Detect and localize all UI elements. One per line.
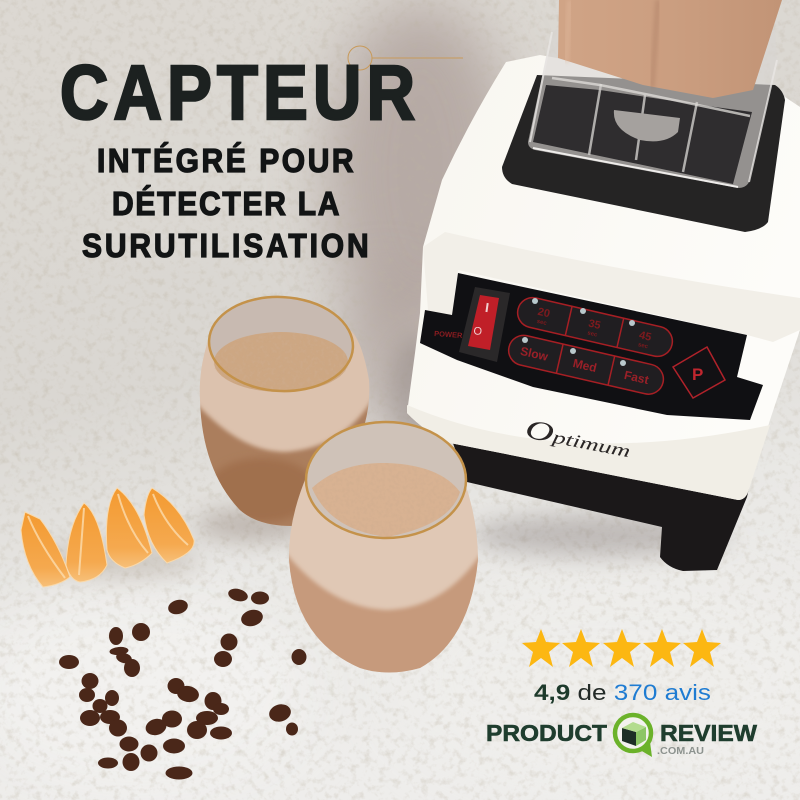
back glass opening bbox=[207, 293, 355, 395]
indicator lights bbox=[522, 298, 635, 366]
clear jar base bbox=[528, 30, 777, 188]
back glass bbox=[195, 293, 375, 530]
front glass bbox=[285, 422, 485, 680]
back glass liquid surface bbox=[214, 332, 348, 392]
pulse button bbox=[673, 347, 725, 398]
speed buttons: Fast bbox=[623, 368, 650, 387]
speed buttons bbox=[506, 332, 666, 397]
rating text: 4,9 de 370 avis bbox=[534, 680, 711, 705]
timer buttons: 20 bbox=[536, 306, 551, 320]
productreview logo bbox=[486, 715, 757, 757]
subtitle: INTÉGRÉ POUR bbox=[97, 142, 354, 179]
rubber jar pad bbox=[502, 75, 785, 232]
logo wordmark review: REVIEW bbox=[660, 720, 757, 746]
blender black base bbox=[450, 435, 760, 571]
decorative circle and line bbox=[348, 46, 463, 70]
speed buttons: Slow bbox=[519, 344, 550, 364]
front glass liquid surface bbox=[312, 463, 460, 537]
timer buttons: sec bbox=[637, 342, 649, 350]
timer buttons: 45 bbox=[638, 329, 652, 344]
rating stars bbox=[522, 629, 721, 667]
shadow of glasses, oranges and blender bbox=[40, 335, 730, 578]
front glass rim bbox=[306, 422, 466, 538]
title: CAPTEUR bbox=[60, 51, 415, 136]
subtitle: DÉTECTER LA bbox=[112, 185, 340, 222]
speed buttons: Med bbox=[572, 356, 598, 375]
control panel bbox=[420, 273, 763, 420]
smoothie in jar bbox=[558, 0, 782, 98]
coffee beans bbox=[59, 587, 306, 780]
brand name: Optimum bbox=[523, 413, 634, 463]
blender bbox=[407, 0, 800, 571]
logo icon bbox=[615, 715, 652, 757]
power switch: O bbox=[473, 325, 483, 338]
subtitle: SURUTILISATION bbox=[82, 227, 369, 264]
logo domain: .COM.AU bbox=[657, 745, 704, 757]
timer buttons: 35 bbox=[587, 318, 602, 332]
logo wordmark product: PRODUCT bbox=[486, 720, 607, 746]
front glass opening bbox=[306, 422, 466, 538]
subtitle bbox=[82, 142, 369, 264]
power switch bbox=[459, 287, 510, 362]
power label: POWER bbox=[434, 329, 463, 340]
pulse button: P bbox=[692, 365, 703, 384]
back glass rim bbox=[207, 293, 355, 395]
timer buttons: sec bbox=[536, 319, 548, 327]
timer buttons: sec bbox=[587, 331, 598, 339]
orange slices bbox=[21, 488, 194, 587]
blender white body bbox=[407, 55, 800, 500]
timer buttons bbox=[515, 295, 675, 359]
